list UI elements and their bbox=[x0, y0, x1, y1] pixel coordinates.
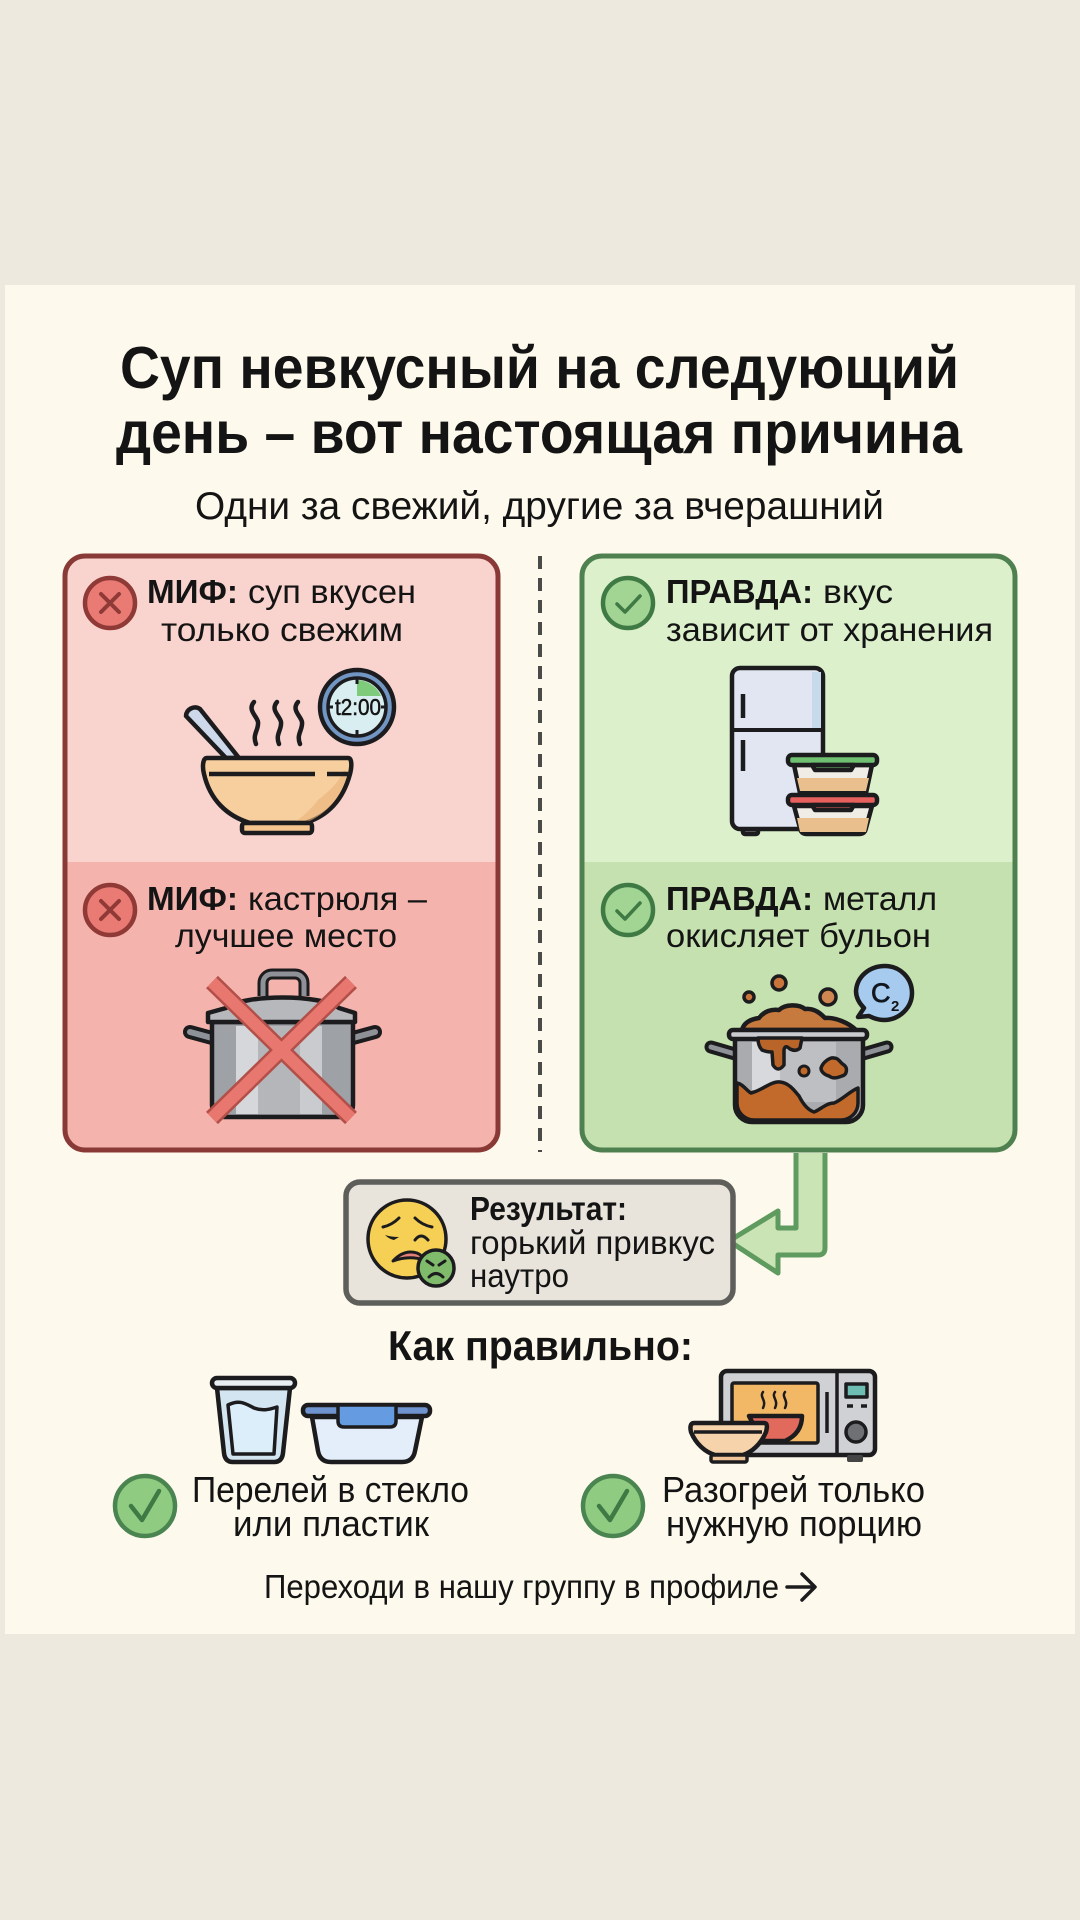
result text bbox=[470, 1190, 715, 1294]
icon: soup bowl with timer: t2:00 bbox=[335, 694, 381, 720]
result text: Результат: bbox=[470, 1190, 627, 1227]
icon: stained pot with oxidation bubble: C bbox=[871, 978, 890, 1008]
tip 2: Разогрей только bbox=[662, 1469, 925, 1510]
heading: how to: Как правильно: bbox=[388, 1322, 693, 1369]
myth 2 text: лучшее место bbox=[175, 917, 397, 954]
truth 2 text: ПРАВДА: bbox=[666, 880, 813, 917]
icon: glass and plastic containers bbox=[212, 1378, 430, 1462]
truth 2 text bbox=[666, 880, 937, 954]
main content background bbox=[5, 285, 1075, 1634]
icon: fridge with containers bbox=[732, 668, 877, 834]
result text: наутро bbox=[470, 1257, 569, 1294]
icon: check 1 bbox=[603, 578, 653, 628]
subtitle: Одни за свежий, другие за вчерашний bbox=[195, 485, 884, 528]
myth 1 text: МИФ: bbox=[147, 573, 238, 610]
icon: soup bowl with timer bbox=[186, 670, 394, 833]
title bbox=[116, 335, 963, 466]
tip 1 bbox=[115, 1469, 469, 1544]
icon: crossed out pot bbox=[190, 974, 375, 1118]
myth 1 text: суп вкусен bbox=[248, 573, 416, 610]
tip 1: или пластик bbox=[233, 1503, 429, 1544]
arrow: cta bbox=[787, 1574, 815, 1600]
tip 2: нужную порцию bbox=[666, 1503, 922, 1544]
icon: stained pot with oxidation bubble bbox=[711, 966, 912, 1122]
truth 1 text bbox=[666, 573, 993, 648]
arrow: truth to result bbox=[729, 1153, 825, 1273]
icon: cross 2 bbox=[85, 885, 135, 935]
icon: check 2 bbox=[603, 885, 653, 935]
icon: sick face bbox=[368, 1200, 454, 1286]
icon: cross 1 bbox=[85, 578, 135, 628]
result box bbox=[346, 1182, 733, 1303]
truth 1 text: вкус bbox=[823, 573, 893, 610]
dashed divider bbox=[538, 556, 542, 1152]
icon: microwave with bowls bbox=[690, 1371, 875, 1462]
tip 1: Перелей в стекло bbox=[192, 1469, 469, 1510]
result text: горький привкус bbox=[470, 1224, 715, 1261]
icon: stained pot with oxidation bubble: 2 bbox=[891, 998, 899, 1015]
title: день – вот настоящая причина bbox=[116, 400, 963, 466]
truth 1 text: зависит от хранения bbox=[666, 611, 993, 648]
call to action: Переходи в нашу группу в профиле bbox=[264, 1568, 779, 1605]
truth 1 text: ПРАВДА: bbox=[666, 573, 813, 610]
myth 2 text bbox=[147, 880, 428, 954]
myth 2 text: кастрюля – bbox=[248, 880, 428, 917]
myth 1 text: только свежим bbox=[161, 611, 403, 648]
tip 2 bbox=[583, 1469, 925, 1544]
myth 2 text: МИФ: bbox=[147, 880, 238, 917]
truth 2 text: металл bbox=[823, 880, 937, 917]
myth 1 text bbox=[147, 573, 416, 648]
panel: truths bbox=[582, 556, 1015, 1150]
title: Суп невкусный на следующий bbox=[120, 335, 959, 401]
truth 2 text: окисляет бульон bbox=[666, 917, 931, 954]
panel: myths bbox=[65, 556, 498, 1150]
